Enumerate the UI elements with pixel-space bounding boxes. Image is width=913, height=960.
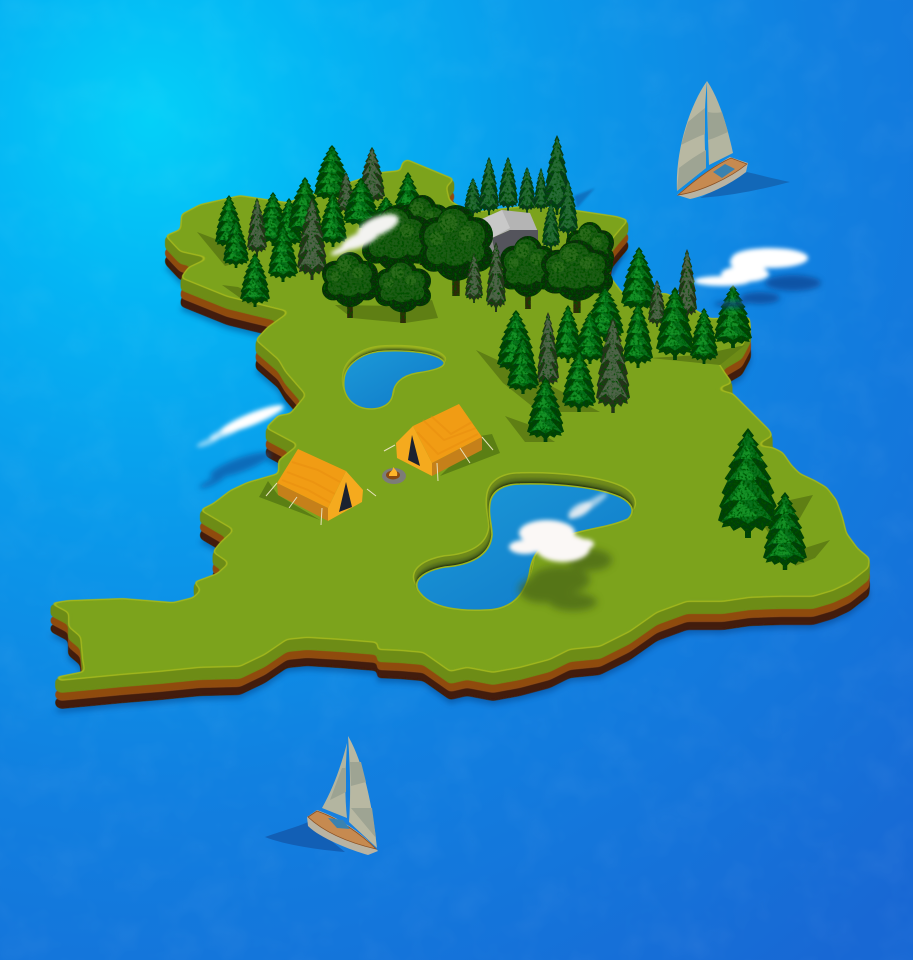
boat hull xyxy=(677,157,748,199)
tent shadow xyxy=(259,481,320,520)
island water shadow xyxy=(49,191,870,713)
island rim xyxy=(49,159,870,681)
tent side wall xyxy=(277,483,328,521)
cloud west with shadow xyxy=(196,401,286,491)
tent: left xyxy=(259,449,376,525)
cloud body xyxy=(694,248,808,286)
boat shadow xyxy=(700,172,790,198)
cloud shadow xyxy=(198,447,272,491)
tent door xyxy=(339,482,352,512)
boat hull xyxy=(307,810,378,855)
sailboat: lower xyxy=(265,736,378,855)
tree shadows on the ground xyxy=(197,232,830,566)
cloud over the forest xyxy=(330,209,402,257)
boat deck xyxy=(308,811,376,849)
tent roof xyxy=(277,449,346,508)
green wall layer xyxy=(49,161,870,693)
cloud shadow xyxy=(714,275,821,307)
tent roof stripes xyxy=(417,416,478,454)
tent ropes xyxy=(384,437,493,481)
tent ropes xyxy=(266,483,376,525)
boat cabin xyxy=(328,818,350,829)
small sail xyxy=(322,743,347,818)
cloud east with shadow xyxy=(694,248,821,307)
tent gable xyxy=(396,426,432,476)
big lake xyxy=(417,476,632,610)
brown soil layer xyxy=(49,173,870,701)
cloud body xyxy=(196,401,286,449)
tent gable xyxy=(328,471,363,521)
boat cabin xyxy=(713,164,735,178)
forest: back row pines xyxy=(215,135,578,307)
rear sail stripe xyxy=(708,112,728,140)
boat shadow xyxy=(265,822,345,852)
forest: east pine grove xyxy=(497,247,752,442)
tent: right xyxy=(384,404,500,481)
tent shadow xyxy=(440,434,500,476)
cloud shadow on land xyxy=(519,549,612,611)
campfire xyxy=(382,467,406,484)
large sail xyxy=(348,736,377,848)
dark soil layer xyxy=(49,181,870,709)
tent roof stripes xyxy=(282,462,340,503)
sailboat: upper right xyxy=(677,81,790,199)
boat deck xyxy=(678,158,747,195)
front sail xyxy=(677,81,707,191)
shadows cast on the water xyxy=(574,188,623,276)
small lake xyxy=(344,347,444,409)
boulder rock xyxy=(473,210,538,262)
tent side wall xyxy=(432,437,482,476)
cloud over the big lake xyxy=(509,490,609,562)
island top surface xyxy=(49,159,870,681)
small sail stripe xyxy=(330,768,346,800)
forest: south-east pine pair xyxy=(718,428,807,570)
tent roof xyxy=(413,404,482,463)
large sail stripes xyxy=(350,762,376,838)
forest: broadleaf trees xyxy=(322,195,614,323)
island landmass xyxy=(49,159,870,713)
tent door xyxy=(408,435,420,466)
front sail stripes xyxy=(677,108,706,191)
rear sail xyxy=(707,81,733,165)
